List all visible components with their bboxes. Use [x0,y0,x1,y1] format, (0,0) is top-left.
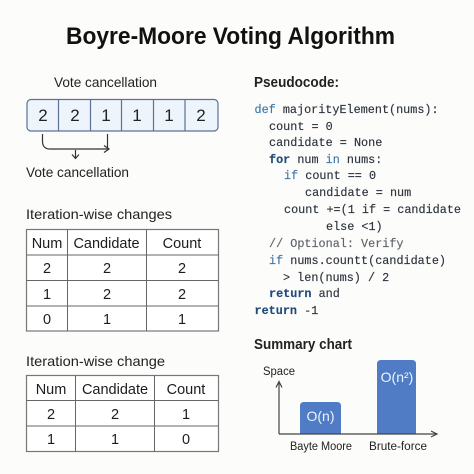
table: iteration-wise change: 0 [182,432,190,448]
table: iteration-wise changes: 2 [103,287,111,303]
code block: for num in nums: [269,153,382,167]
array cells: 1 [101,106,111,125]
heading: iteration-wise changes: Iteration-wise changes [26,206,172,222]
code block: count = 0 [269,120,333,134]
code block: // Optional: Verify [269,237,404,251]
code block [254,103,461,318]
bar: brute-force: O(n²) [381,369,413,385]
table: iteration-wise changes: 1 [178,312,186,328]
bar chart: space complexity [263,360,437,453]
label: y axis: Space [263,366,295,378]
table: iteration-wise change: 1 [182,407,190,423]
array cells: 1 [164,106,174,125]
title: Boyre-Moore Voting Algorithm [66,23,395,50]
table: iteration-wise change: 1 [47,432,55,448]
table: iteration-wise changes [26,230,218,331]
bar: brute-force [377,360,416,434]
table: iteration-wise change [26,376,218,452]
table: iteration-wise changes: Candidate [73,236,140,252]
label: Brute-force: Brute-force [369,441,427,453]
code block: count +=(1 if = candidate [284,203,461,217]
table: iteration-wise changes: 1 [103,312,111,328]
heading: pseudocode: Pseudocode: [254,75,339,91]
table: iteration-wise changes: 1 [43,287,51,303]
heading: summary chart: Summary chart [254,337,352,353]
table: iteration-wise changes: 0 [43,312,51,328]
table: iteration-wise changes: 2 [43,261,51,277]
code block: if nums.countt(candidate) [269,254,446,268]
code block: return and [269,287,340,301]
code block: candidate = num [305,186,411,200]
table: iteration-wise change: Candidate [82,382,148,398]
code block: return -1 [254,304,318,318]
table: iteration-wise changes: Count [163,236,201,252]
array cells: 2 [196,106,206,125]
array cells: 2 [38,106,48,125]
code block: def majorityElement(nums): [254,103,439,117]
table: iteration-wise changes: 2 [103,261,111,277]
bar: Boyer-Moore: O(n) [306,408,334,424]
array cells [27,100,218,131]
chart axes [276,382,437,437]
table: iteration-wise change: 1 [111,432,119,448]
label: Bayte Moore: Bayte Moore [290,441,352,453]
table: iteration-wise changes: Num [32,236,62,252]
table: iteration-wise change: Num [36,382,66,398]
code block: candidate = None [269,136,382,150]
bar: Boyer-Moore [300,402,341,434]
table: iteration-wise change: 2 [47,407,55,423]
table: iteration-wise changes: 2 [178,287,186,303]
table: iteration-wise change: Count [167,382,205,398]
array cells: 1 [132,106,142,125]
table: iteration-wise changes: 2 [178,261,186,277]
code block: > len(nums) / 2 [283,271,389,285]
code block: else <1) [326,220,383,234]
array diagram: vote cancellation [26,74,218,180]
label: vote cancellation bottom: Vote cancellation [26,164,129,180]
label: vote cancellation top: Vote cancellation [54,74,157,90]
icon: cancellation arrows [42,134,109,158]
code block: if count == 0 [284,169,376,183]
array cells: 2 [70,106,80,125]
heading: iteration-wise change: Iteration-wise change [26,353,165,369]
table: iteration-wise change: 2 [111,407,119,423]
